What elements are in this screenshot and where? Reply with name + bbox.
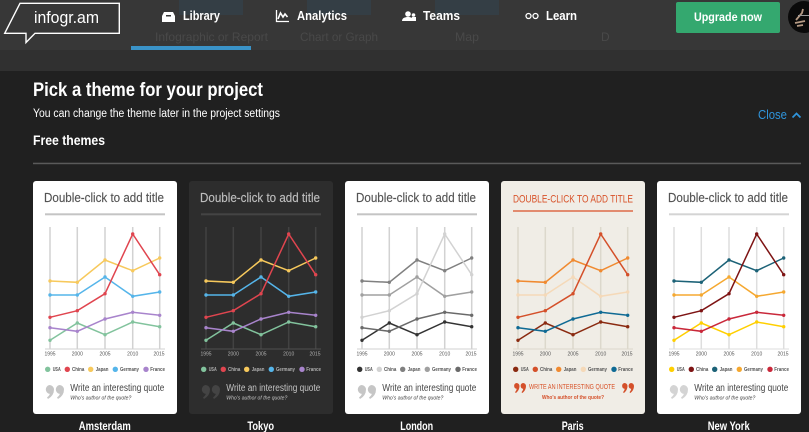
theme card: Paris: 2010: [595, 352, 606, 358]
theme card: Paris: 2000: [540, 352, 551, 358]
legend: Japan: [564, 367, 576, 373]
theme card: Amsterdam: 2010: [127, 352, 138, 358]
legend: [669, 367, 789, 373]
nav: learn: [526, 9, 577, 23]
legend: France: [306, 367, 321, 373]
theme card: Paris: WRITE AN INTERESTING QUOTE: [529, 382, 615, 391]
legend: Germany: [588, 367, 607, 373]
theme card: Amsterdam: 2005: [99, 352, 111, 358]
theme card: London: [345, 181, 489, 414]
theme card: Amsterdam: [33, 181, 177, 414]
avatar: [788, 1, 809, 33]
legend: Germany: [120, 367, 139, 373]
theme card: New York: 2015: [777, 352, 789, 358]
theme card: Paris: 2005: [567, 352, 579, 358]
nav: analytics: [276, 9, 347, 23]
legend: USA: [53, 367, 61, 373]
legend: France: [618, 367, 633, 373]
nav: learn: Learn: [546, 9, 577, 23]
line chart: [204, 232, 317, 342]
upgrade button: Upgrade now: [694, 10, 763, 24]
line chart: [516, 232, 629, 342]
nav: analytics: Analytics: [297, 9, 347, 23]
theme card: Tokyo: 2010: [283, 352, 294, 358]
theme card: New York: 2005: [723, 352, 735, 358]
theme card: New York: Who's author of the quote?: [694, 395, 756, 401]
legend: China: [540, 367, 552, 373]
legend: USA: [677, 367, 685, 373]
theme card: New York: Double-click to add title: [668, 190, 788, 205]
legend: USA: [365, 367, 373, 373]
legend: China: [228, 367, 240, 373]
legend: Japan: [252, 367, 264, 373]
theme card: London: 2000: [384, 352, 395, 358]
header bar: [0, 0, 809, 71]
theme card: Tokyo: Write an interesting quote: [226, 383, 321, 394]
theme card: New York: 2010: [751, 352, 762, 358]
legend: France: [150, 367, 165, 373]
nav: library: Library: [183, 9, 220, 23]
logo: [5, 3, 119, 43]
theme card: Paris: DOUBLE-CLICK TO ADD TITLE: [513, 194, 633, 206]
legend: China: [384, 367, 396, 373]
theme card: Tokyo: Who's author of the quote?: [226, 395, 288, 401]
theme card: London: Write an interesting quote: [382, 383, 477, 394]
legend: Japan: [720, 367, 732, 373]
theme card: Tokyo: 2000: [228, 352, 239, 358]
legend: [513, 367, 633, 373]
legend: USA: [521, 367, 529, 373]
theme card: Tokyo: 2005: [255, 352, 267, 358]
theme card: Paris: 1995: [512, 352, 524, 358]
legend: [45, 367, 165, 373]
close control: Close: [758, 108, 787, 122]
legend: [357, 367, 477, 373]
theme card: London: Double-click to add title: [356, 190, 476, 205]
legend: Japan: [96, 367, 108, 373]
legend: [201, 367, 321, 373]
upgrade button: [676, 2, 780, 33]
theme card: New York: Write an interesting quote: [694, 383, 789, 394]
theme card: Amsterdam: 2000: [72, 352, 83, 358]
theme card: Paris: [501, 181, 645, 414]
section label: Free themes: [33, 133, 105, 148]
faded tab labels: Map: [455, 30, 479, 44]
theme card: Paris: Who's author of the quote?: [542, 395, 605, 401]
nav: teams: Teams: [423, 9, 460, 23]
theme card: Tokyo: 2015: [309, 352, 321, 358]
theme card: London: 2005: [411, 352, 423, 358]
faded tab labels: Chart or Graph: [300, 30, 378, 44]
nav: teams: [402, 9, 460, 23]
theme card: Tokyo: 1995: [200, 352, 212, 358]
theme card: New York: [657, 181, 801, 414]
legend: Japan: [408, 367, 420, 373]
legend: China: [72, 367, 84, 373]
line chart: [672, 232, 785, 342]
logo: infogr.am: [34, 8, 99, 27]
theme card: Amsterdam: 2015: [153, 352, 165, 358]
theme card: London: 1995: [356, 352, 368, 358]
legend: France: [774, 367, 789, 373]
subheading: You can change the theme later in the project settings: [33, 108, 280, 120]
theme card: Tokyo: [189, 181, 333, 414]
legend: Germany: [744, 367, 763, 373]
line chart: [48, 232, 161, 342]
theme card: London: Who's author of the quote?: [382, 395, 444, 401]
line chart: [360, 232, 473, 342]
theme card: London: 2015: [465, 352, 477, 358]
legend: France: [462, 367, 477, 373]
theme card: Amsterdam: 1995: [44, 352, 56, 358]
theme card: Paris: 2015: [621, 352, 633, 358]
faded tab labels: D: [601, 30, 610, 44]
nav: library: [162, 9, 220, 23]
theme card: Amsterdam: Double-click to add title: [44, 190, 164, 205]
faded tab labels: Infographic or Report: [155, 30, 269, 44]
legend: Germany: [432, 367, 451, 373]
legend: Germany: [276, 367, 295, 373]
theme card: New York: 1995: [668, 352, 680, 358]
theme card: Tokyo: Double-click to add title: [200, 190, 320, 205]
heading: Pick a theme for your project: [33, 80, 264, 101]
theme card: New York: 2000: [696, 352, 707, 358]
legend: China: [696, 367, 708, 373]
faded tab labels: [155, 30, 610, 44]
legend: USA: [209, 367, 217, 373]
theme card: Amsterdam: Who's author of the quote?: [70, 395, 132, 401]
theme card: London: 2010: [439, 352, 450, 358]
theme card: Amsterdam: Write an interesting quote: [70, 383, 165, 394]
